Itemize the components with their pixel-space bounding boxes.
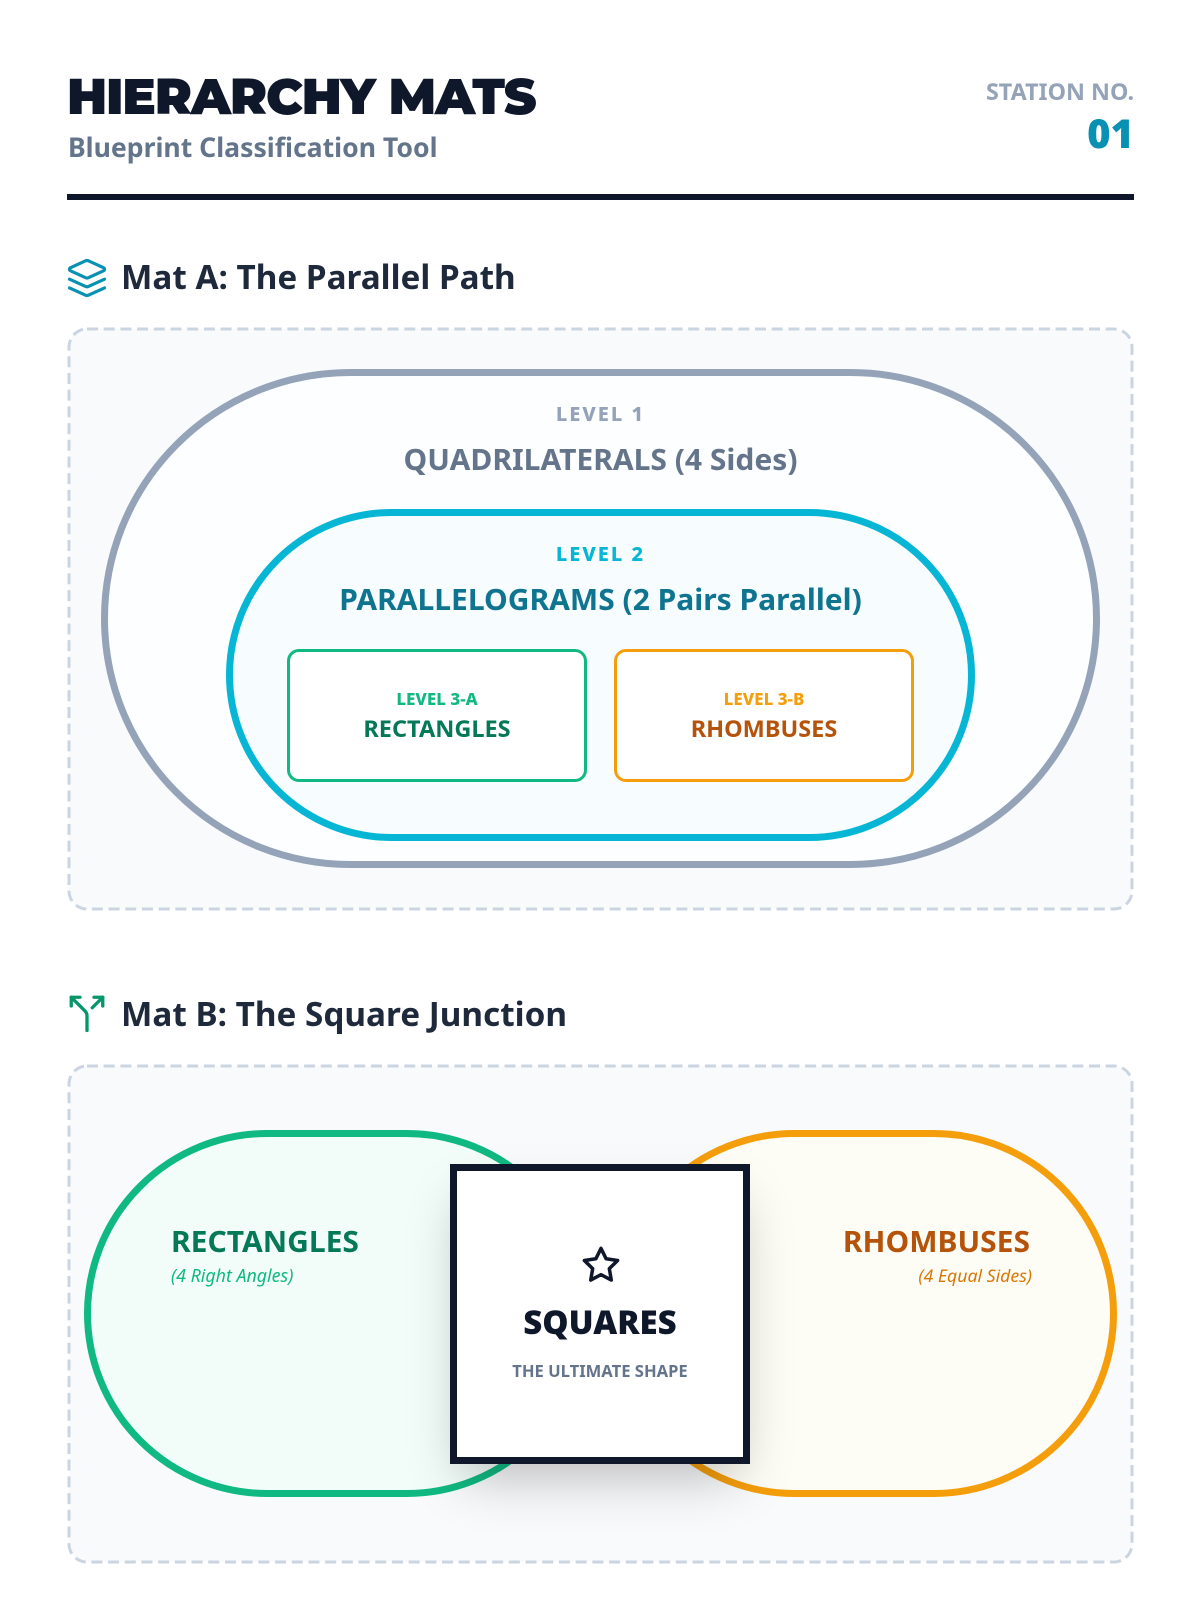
rhombuses name: RHOMBUSES [843, 1220, 1030, 1261]
station number: 01 [1087, 105, 1134, 160]
level 3-B name: RHOMBUSES [691, 712, 837, 744]
level 3-A box [287, 649, 587, 782]
level 3-A label: LEVEL 3-A [396, 687, 478, 710]
title: HIERARCHY MATS [67, 66, 535, 127]
rectangles name: RECTANGLES [171, 1220, 359, 1261]
level 1 name: QUADRILATERALS (4 Sides) [404, 438, 798, 479]
icon: layers [68, 258, 106, 298]
icon: split arrows [70, 996, 104, 1032]
level 1 pill: quadrilaterals [101, 369, 1100, 868]
level 3-A name: RECTANGLES [363, 712, 511, 744]
station label: STATION NO. [986, 75, 1134, 107]
level 2 label: LEVEL 2 [556, 540, 645, 567]
heading: Mat A: Mat A: The Parallel Path [121, 253, 516, 299]
squares name: SQUARES [523, 1299, 677, 1344]
rhombuses pill [611, 1130, 1117, 1497]
rectangles note: (4 Right Angles) [171, 1264, 293, 1288]
level 3-B label: LEVEL 3-B [724, 687, 804, 710]
header rule [67, 194, 1134, 200]
subtitle: Blueprint Classification Tool [68, 129, 438, 165]
panel: Mat B [68, 1064, 1134, 1564]
squares center card [450, 1164, 750, 1464]
squares note: THE ULTIMATE SHAPE [512, 1359, 688, 1382]
rectangles pill [84, 1130, 590, 1497]
panel: Mat A [68, 328, 1134, 910]
heading: Mat B: Mat B: The Square Junction [121, 990, 567, 1036]
icon: star [582, 1246, 620, 1282]
level 2 pill: parallelograms [226, 509, 975, 841]
level 2 name: PARALLELOGRAMS (2 Pairs Parallel) [339, 578, 862, 619]
level 3-B box [614, 649, 914, 782]
rhombuses note: (4 Equal Sides) [918, 1264, 1032, 1288]
level 1 label: LEVEL 1 [556, 400, 645, 427]
